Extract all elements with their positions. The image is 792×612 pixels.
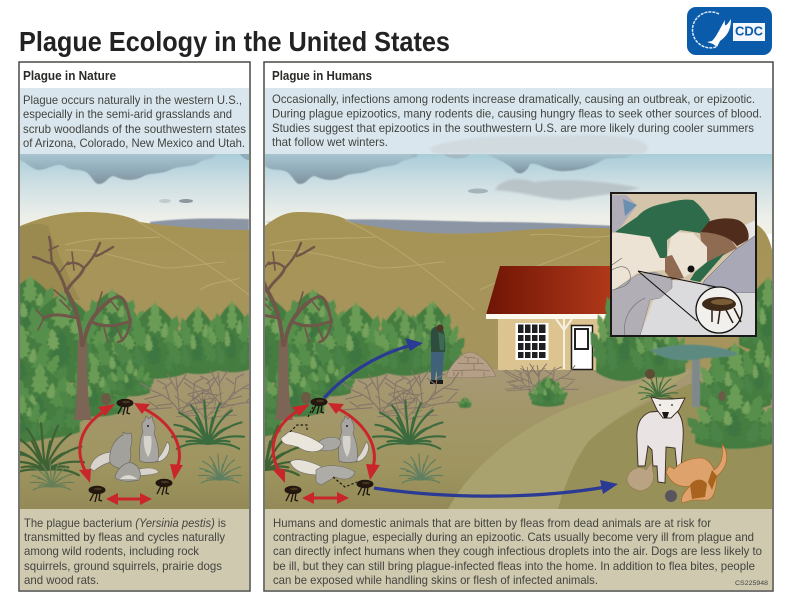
text block: humans caption: can directly infect humans when they cough infectious droplets into the air. Dogs are less likely to [273,544,762,558]
mid cloud [495,179,640,200]
text block: humans caption: Humans and domestic animals that are bitten by fleas from dead animals are at risk for [273,516,711,530]
rodent on ground [665,490,677,502]
inset: woman sleeping with dog [611,193,756,336]
text block: humans intro: During plague epizootics, many rodents die, causing hungry fleas to seek other sources of blood. [272,106,762,120]
storm cloud [20,154,216,184]
flea cycle arrows [79,403,183,505]
icon: flea magnified [696,287,742,333]
cat [666,444,727,503]
path [448,372,690,509]
grass tufts [6,401,244,490]
text block: nature intro: especially in the semi-arid grasslands and [23,107,232,121]
dead tree [33,237,131,420]
scene: nature landscape [20,154,249,509]
rock pile [446,352,496,378]
door [572,326,592,370]
text block: nature intro: Plague occurs naturally in the western U.S., [23,93,242,107]
text block: nature caption: squirrels, ground squirrels, prairie dogs [24,559,222,573]
text block: nature caption [24,516,226,587]
text block: nature caption: and wood rats. [24,573,99,587]
fleas [88,399,172,502]
rodents [281,416,369,485]
text block: nature intro [23,93,246,150]
panel band: header text background [20,88,249,154]
flea cycle arrows [273,403,380,504]
dead tree [265,242,333,420]
right window [605,342,627,362]
text block: nature caption: The plague bacterium (Yersinia pestis) is [24,516,226,530]
text block: humans caption: can be exposed while handling skins or flesh of infected animals. [273,573,598,587]
text block: humans intro: Studies suggest that epizootics in the southwestern U.S. are more likely during cooler summers [272,121,754,135]
text block: nature caption: transmitted by fleas and cycles naturally [24,530,225,544]
text block: humans caption: be ill, but they can still bring plague-infected fleas into the home. In addition to flea bites, people [273,559,755,573]
storm clouds [265,154,632,184]
text block: humans caption: contracting plague, especially during an epizootic. Cats usually become very ill from plague and [273,530,754,544]
text block: humans intro [272,92,762,149]
reference code: CS225948 [735,580,768,587]
text block: nature intro: scrub woodlands of the southwestern states [23,122,246,136]
panel band: caption background [20,509,249,590]
text block: nature intro: of Arizona, Colorado, New Mexico and Utah. [23,136,245,150]
title: Plague Ecology in the United States [19,26,450,57]
text block: humans caption [273,516,762,587]
text block: nature caption: among wild rodents, including rock [24,544,200,558]
blue arrow to animals [374,480,618,496]
icon: HHS eagle seal [692,12,731,48]
rodents [90,416,170,481]
man [430,324,445,384]
small shrubs by house [457,376,571,408]
shrubs [20,276,249,443]
hillside [20,212,249,333]
text block: humans intro: that follow wet winters. [272,135,388,149]
blue arrow to man [324,338,423,398]
shrubs [265,288,466,437]
roof [486,266,610,314]
house [486,266,610,370]
rodent: wood rat [115,463,159,481]
panel: Plague in Humans [263,61,774,592]
distant hills [266,218,610,234]
hillside [265,212,772,369]
panel: Plague in Nature [18,61,251,592]
twig brush [341,364,579,420]
dead squirrel upper [281,431,341,452]
rodent: rock squirrel [90,432,132,471]
text block: humans intro: Occasionally, infections among rodents increase dramatically, causing an outbreak, or epizootic. [272,92,755,106]
cloud over text band [430,135,648,154]
ground [20,365,249,509]
trees on right [590,276,772,450]
scene: human landscape [265,154,772,509]
rabbit [627,462,654,491]
logo: HHS and CDC [687,7,772,55]
panel band: caption background [265,509,772,590]
heading: Plague in Nature: Plague in Nature [23,69,116,83]
grass tufts [265,376,678,484]
panel band: header text background [265,88,772,154]
distant hills [150,218,249,230]
dead squirrel lower [290,460,355,485]
ground [265,369,772,509]
flea tracks [290,407,357,487]
fleas [284,398,374,502]
icon: CDC wordmark: CDC [735,24,764,38]
window [516,323,548,360]
dog [637,397,685,483]
heading: Plague in Humans: Plague in Humans [272,69,372,83]
twig brush [140,370,262,420]
